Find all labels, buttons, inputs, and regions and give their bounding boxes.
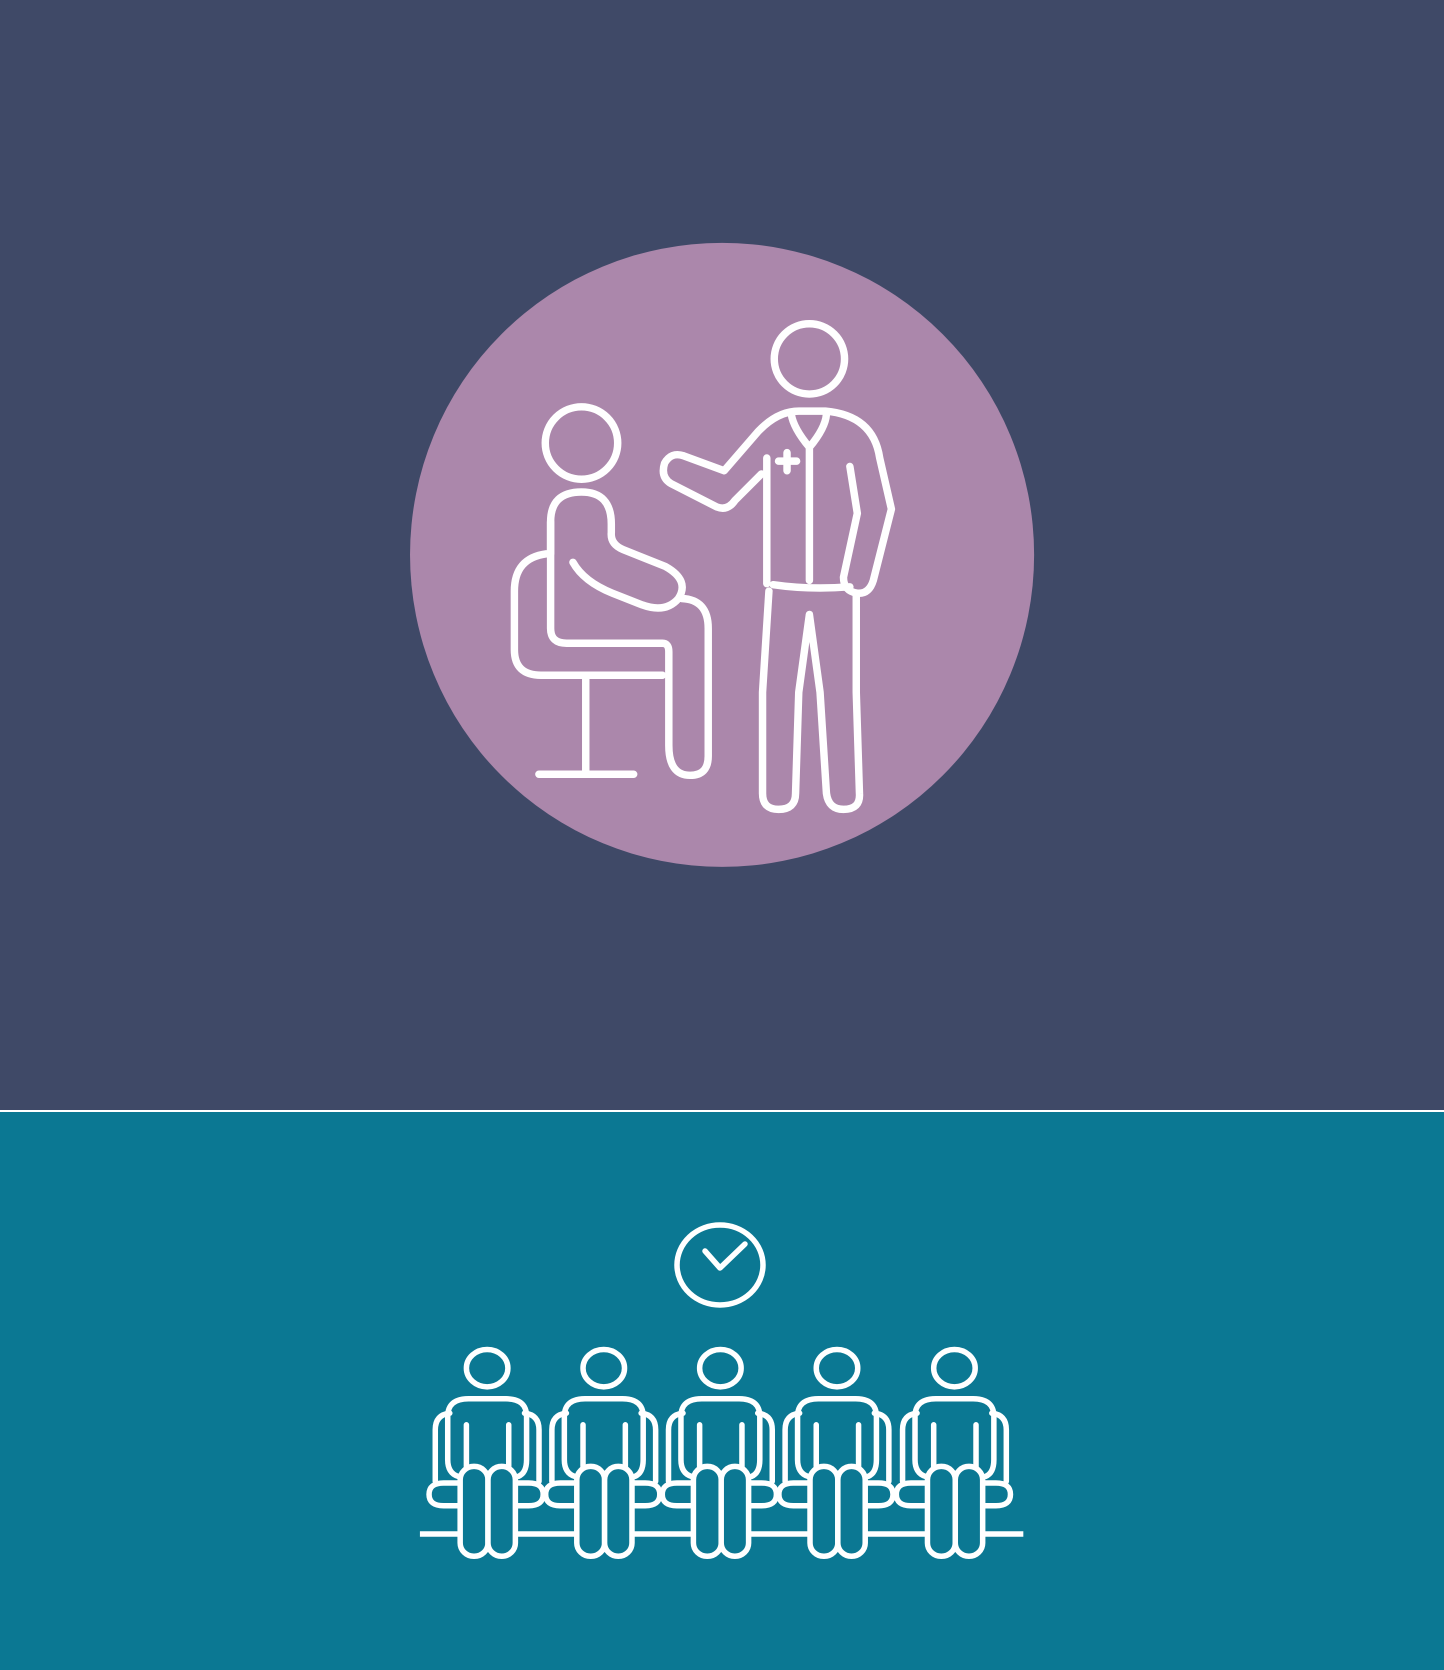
icon: doctor: [663, 324, 891, 809]
icon: row of seated people: [420, 1350, 1023, 1556]
icon: purple circle with doctor and patient: [410, 243, 1034, 867]
icon: clock: [677, 1225, 763, 1305]
person 1: [429, 1350, 543, 1556]
person 4: [779, 1350, 893, 1556]
panel: top consultation: [0, 0, 1444, 1110]
icon: patient: [514, 407, 708, 775]
person 2: [546, 1350, 660, 1556]
panel: bottom waiting room: [0, 1112, 1444, 1670]
person 5: [896, 1350, 1010, 1556]
person 3: [662, 1350, 776, 1556]
